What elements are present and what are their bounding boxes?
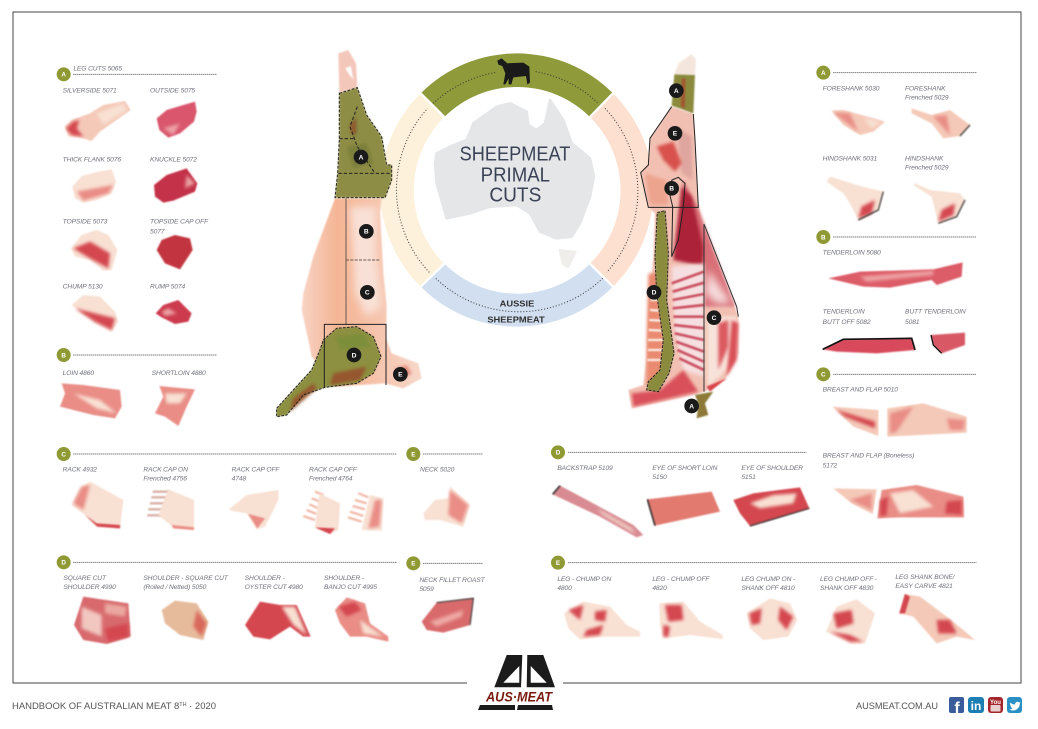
cut: breast and flap boneless: BREAST AND FLAP (Boneless) (823, 453, 914, 460)
cut: butt tenderloin: BUTT TENDERLOIN (905, 309, 966, 316)
cut: tenderloin: TENDERLOIN 5080 (823, 250, 881, 257)
footer left text: HANDBOOK OF AUSTRALIAN MEAT 8 (12, 701, 182, 712)
cut: thick flank: THICK FLANK 5076 (63, 157, 121, 164)
section marker E: neck (406, 447, 483, 461)
section marker D: backstrap (551, 445, 807, 459)
cut: leg chump on: LEG - CHUMP ON (557, 576, 611, 583)
cut region D (277, 327, 381, 417)
carcass label badges: D (652, 290, 657, 297)
cut: rack cap off: RACK CAP OFF (232, 467, 280, 474)
carcass label badges: E (398, 372, 403, 379)
cut: foreshank frenched: Frenched 5029 (905, 95, 949, 102)
cut: foreshank frenched (905, 86, 970, 138)
cut: tenderloin butt off (823, 309, 915, 353)
cut: hindshank frenched: Frenched 5029 (905, 165, 949, 172)
cut: leg chump off shank off: SHANK OFF 4830 (820, 585, 874, 592)
cut: leg chump on: 4800 (557, 585, 572, 592)
section marker E: neck: E (411, 451, 415, 458)
ring diagram (380, 53, 653, 327)
cut: shoulder oyster cut (245, 575, 311, 639)
section marker E: leg (551, 556, 977, 570)
panel: right foreshank, tenderloin and breast cuts (816, 66, 977, 518)
centre graphic (277, 50, 738, 418)
map of Australia (435, 100, 594, 268)
cut: rack cap off frenched: Frenched 4764 (309, 476, 353, 483)
carcass label badges: A (359, 154, 364, 161)
cut: eye of shoulder: 5151 (741, 474, 756, 481)
social icons: f (954, 700, 960, 717)
cut: rack cap off: 4748 (232, 476, 246, 483)
cut: eye of shoulder: EYE OF SHOULDER (741, 465, 803, 472)
cut region A upper (672, 74, 695, 113)
cut: breast and flap: BREAST AND FLAP 5010 (823, 387, 898, 394)
cut: neck (420, 467, 470, 527)
cut: square cut shoulder (63, 575, 131, 644)
footer left text: TH (179, 702, 187, 708)
cut: rack (63, 467, 123, 528)
cut: topside cap off: TOPSIDE CAP OFF (150, 218, 209, 225)
cut: eye of shoulder (733, 465, 809, 526)
cut: hindshank frenched (905, 156, 965, 223)
panel: bottom left rack, shoulder and neck cuts (57, 447, 486, 644)
cut: topside (63, 218, 117, 271)
cut: backstrap (553, 465, 643, 537)
cut: breast and flap boneless (823, 453, 964, 518)
cut: hindshank frenched: HINDSHANK (905, 156, 944, 163)
section marker A: leg cuts: LEG CUTS 5065 (73, 66, 122, 73)
cut: eye of short loin (647, 465, 720, 526)
cut: breast and flap boneless: 5172 (823, 463, 837, 470)
cut: leg shank bone easy carve: EASY CARVE 4821 (895, 583, 953, 590)
section marker C: breast and flap (816, 367, 976, 381)
ring label (487, 299, 545, 325)
section marker A: shanks (816, 66, 977, 80)
cut: foreshank (823, 86, 885, 135)
cut: eye of short loin: 5150 (652, 474, 667, 481)
cut: thick flank (63, 157, 121, 203)
carcass label badges: A (689, 403, 694, 410)
cut: neck: NECK 5020 (420, 467, 455, 474)
panel: bottom right backstrap and leg cuts (551, 445, 977, 644)
cut: neck fillet roast: 5059 (419, 586, 434, 593)
section marker E: neck fillet: E (411, 561, 415, 568)
section marker C: rack (57, 447, 397, 461)
logo: AUS-MEAT: AUS·MEAT (485, 688, 553, 704)
footer website: AUSMEAT.COM.AU (856, 701, 938, 712)
logo: AUS-MEAT (478, 655, 555, 710)
cut: shoulder banjo cut: BANJO CUT 4995 (324, 584, 377, 591)
section marker C: rack: C (61, 451, 66, 458)
footer left text: · 2020 (187, 701, 216, 712)
section marker A: leg cuts: A (61, 72, 66, 79)
carcass label badges: B (364, 229, 369, 236)
cut: butt tenderloin: 5081 (905, 319, 920, 326)
cut: leg chump off: LEG - CHUMP OFF (652, 576, 710, 583)
cut: outside (150, 88, 197, 138)
section marker E: leg: E (556, 560, 560, 567)
title: SHEEPMEAT (460, 143, 571, 166)
section marker E: neck fillet (406, 556, 483, 570)
cut: tenderloin butt off: BUTT OFF 5082 (823, 319, 871, 326)
section marker A: leg cuts (57, 66, 217, 81)
icon: sheep (497, 58, 530, 84)
ring label: AUSSIE (500, 299, 535, 309)
carcass label badges: B (669, 186, 674, 193)
title: PRIMAL (481, 164, 550, 187)
cut: shoulder banjo cut (324, 575, 388, 642)
cut: chump: CHUMP 5130 (63, 283, 103, 290)
cut: topside cap off (150, 218, 209, 269)
cut: leg chump off (652, 576, 723, 639)
cut: leg chump on shank off (741, 576, 797, 640)
cut: neck fillet roast: NECK FILLET ROAST (419, 577, 486, 584)
cut: foreshank frenched: FORESHANK (905, 86, 946, 93)
cut: butt tenderloin (905, 309, 966, 353)
cut: outside: OUTSIDE 5075 (150, 88, 195, 95)
cut: breast and flap (823, 387, 967, 437)
carcass label badges: C (365, 290, 370, 297)
title (460, 143, 571, 207)
cut: backstrap: BACKSTRAP 5109 (557, 465, 613, 472)
cut: leg chump on shank off: LEG CHUMP ON - (741, 576, 796, 583)
cut: topside cap off: 5077 (150, 228, 165, 235)
cut: rack cap on: RACK CAP ON (143, 467, 188, 474)
section marker C: breast and flap: C (821, 372, 826, 379)
cut: hindshank (823, 156, 883, 220)
cut: knuckle (150, 157, 197, 203)
cut: leg chump off shank off (820, 576, 878, 644)
cut: rack cap off frenched: RACK CAP OFF (309, 467, 358, 474)
cut: leg shank bone easy carve (895, 574, 975, 643)
ring label: SHEEPMEAT (487, 315, 545, 325)
section marker B (57, 348, 217, 362)
cut: leg chump on shank off: SHANK OFF 4810 (741, 585, 795, 592)
carcass label badges (347, 83, 721, 413)
section marker D: shoulder (57, 555, 397, 569)
cut: tenderloin (823, 250, 963, 288)
cut: shoulder rolled netted: (Rolled / Netted) 5050 (143, 584, 207, 591)
section marker B: B (61, 352, 66, 359)
cut region A (335, 88, 392, 198)
cut: square cut shoulder: SQUARE CUT (63, 575, 107, 582)
social icons: in (971, 699, 981, 713)
section marker D: backstrap: D (556, 450, 561, 457)
cut: leg shank bone easy carve: LEG SHANK BONE/ (895, 574, 956, 581)
section marker B: tenderloin (816, 230, 976, 244)
cut: rack cap on: Frenched 4756 (143, 476, 187, 483)
carcass label badges: E (673, 131, 678, 138)
cut: rack cap on (143, 467, 194, 530)
section marker B: tenderloin: B (821, 234, 826, 241)
cut: shortloin (152, 370, 206, 426)
carcass label badges: C (712, 315, 717, 322)
section marker A: shanks: A (821, 70, 826, 77)
cut: loin (60, 370, 122, 418)
cut: leg chump off: 4820 (652, 585, 667, 592)
cut: leg chump off shank off: LEG CHUMP OFF - (820, 576, 878, 583)
cut: foreshank: FORESHANK 5030 (823, 86, 880, 93)
cut: tenderloin butt off: TENDERLOIN (823, 309, 865, 316)
cut: chump (63, 283, 118, 332)
cut: rack cap off (228, 467, 280, 529)
cut: topside: TOPSIDE 5073 (63, 218, 108, 225)
left carcass (277, 50, 422, 417)
panel: left leg and loin cuts (57, 66, 217, 426)
social icons: You (990, 700, 1001, 706)
right carcass (628, 54, 738, 418)
cut: silverside: SILVERSIDE 5071 (63, 88, 117, 95)
cut: leg chump on (557, 576, 640, 639)
cut region D strip (647, 211, 674, 392)
cut: shoulder rolled netted: SHOULDER - SQUARE CUT (143, 575, 229, 582)
cut: eye of short loin: EYE OF SHORT LOIN (652, 465, 718, 472)
cut: neck fillet roast (419, 577, 486, 633)
cut: rack: RACK 4932 (63, 467, 97, 474)
cut: shoulder oyster cut: SHOULDER - (245, 575, 286, 582)
cut: shoulder rolled netted (143, 575, 229, 640)
cut: loin: LOIN 4860 (63, 370, 94, 377)
carcass label badges: A (674, 88, 679, 95)
cut: hindshank: HINDSHANK 5031 (823, 156, 878, 163)
cut: square cut shoulder: SHOULDER 4990 (63, 584, 116, 591)
social icons (949, 697, 1022, 717)
carcass label badges: D (352, 352, 357, 359)
cut: rump (150, 283, 192, 324)
cut: shoulder oyster cut: OYSTER CUT 4980 (245, 584, 303, 591)
cut: rump: RUMP 5074 (150, 283, 186, 290)
cut: shoulder banjo cut: SHOULDER - (324, 575, 365, 582)
cut: shortloin: SHORTLOIN 4880 (152, 370, 206, 377)
cut: silverside (63, 88, 131, 141)
cut: rack cap off frenched (303, 467, 383, 534)
cut: knuckle: KNUCKLE 5072 (150, 157, 197, 164)
section marker D: shoulder: D (61, 560, 66, 567)
title: CUTS (489, 184, 541, 207)
